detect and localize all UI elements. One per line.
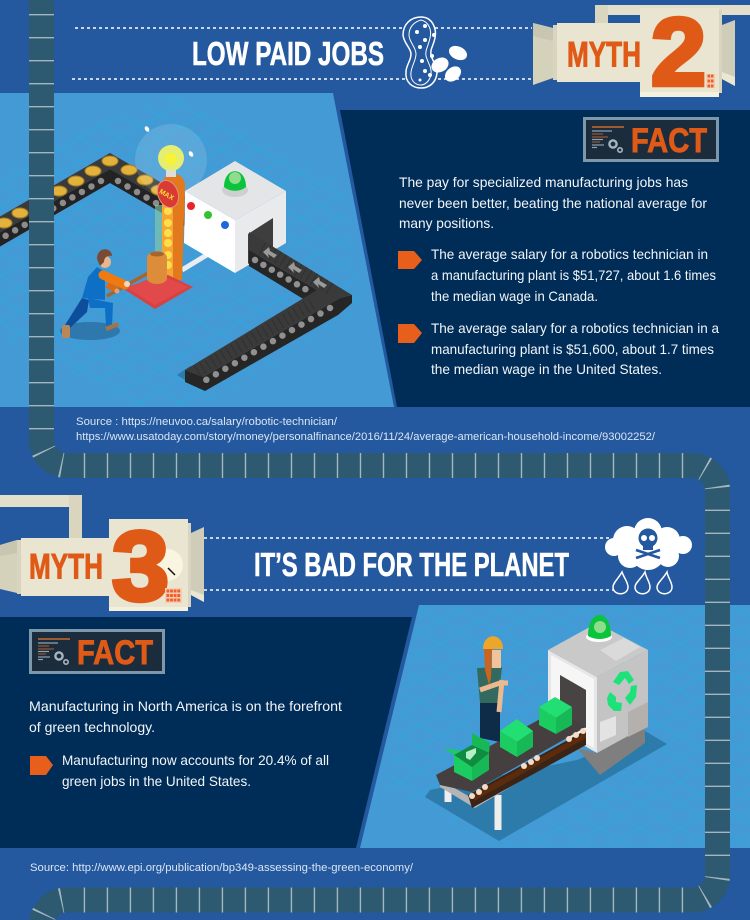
heading: bad for the planet: IT’S BAD FOR THE PLANET (254, 546, 569, 583)
badge: fact myth 2 (584, 118, 718, 160)
text: myth 2 sources (76, 416, 656, 443)
panel: myth 2 illustration floor (0, 93, 394, 407)
icon: bullet arrow (398, 324, 422, 343)
illustration: high striker tower (122, 124, 207, 309)
badge: fact myth 3: FACT (77, 634, 153, 672)
banner: myth 3: MYTH (29, 548, 103, 586)
text: myth 3 fact intro (29, 698, 342, 735)
icon: bullet arrow (30, 756, 53, 775)
badge: fact myth 3 (30, 630, 164, 672)
text: myth 2 sources: Source : https://neuvoo.ca/salary/robotic-technician/ (76, 416, 338, 428)
dotted rules: myth 2 title (72, 28, 532, 79)
banner: myth 2: MYTH (567, 36, 641, 74)
text: us salary: manufacturing plant is $51,600, about 1.7 times (431, 341, 714, 357)
text: canada salary (431, 246, 716, 304)
text: myth 3 fact intro: Manufacturing in North America is on the forefront (29, 698, 342, 714)
heading: low paid jobs: LOW PAID JOBS (192, 35, 384, 72)
dotted rules: myth 3 title (204, 538, 615, 590)
illustration: coin conveyor (0, 153, 200, 258)
panel: myth 3 illustration floor (360, 605, 750, 848)
banner: myth 2: 2 (651, 0, 706, 106)
text: us salary: the median wage in the United States. (431, 361, 662, 377)
text: myth 2 fact intro: The pay for specialized manufacturing jobs has (399, 174, 688, 190)
text: myth 2 fact intro: never been better, beating the national average for (399, 195, 707, 211)
text: green jobs: Manufacturing now accounts for 20.4% of all (62, 752, 329, 768)
illustration: output conveyor (177, 232, 352, 391)
icon: bullet arrow (398, 251, 422, 269)
banner: myth 2 (533, 0, 750, 106)
text: canada salary: a manufacturing plant is $51,727, about 1.6 times (431, 267, 716, 283)
illustration: white machine (182, 161, 286, 273)
banner: myth 3: 3 (112, 511, 169, 621)
panel: myth 3 fact background (0, 617, 412, 848)
illustration: belt with green boxes (436, 697, 586, 830)
illustration: woman worker (477, 636, 508, 742)
illustration: high striker tower: MAX (158, 188, 175, 202)
text: myth 3 fact intro: of green technology. (29, 719, 155, 735)
text: us salary (431, 320, 719, 377)
text: green jobs (62, 752, 329, 789)
text: myth 3 source: Source: http://www.epi.org/publication/bp349-assessing-the-green-economy/ (30, 862, 414, 874)
illustration: worker with mallet (60, 249, 167, 340)
text: us salary: The average salary for a robotics technician in a (431, 320, 719, 336)
text: canada salary: the median wage in Canada. (431, 288, 598, 304)
text: myth 2 fact intro (399, 174, 707, 231)
icon: toxic cloud (605, 518, 692, 594)
text: canada salary: The average salary for a robotics technician in (431, 246, 708, 262)
text: myth 2 fact intro: many positions. (399, 215, 494, 231)
illustration: green box conveyor machine (425, 615, 667, 841)
panel: myth 2 fact background (340, 110, 750, 407)
text: green jobs: green jobs in the United States. (62, 773, 251, 789)
badge: fact myth 2: FACT (631, 122, 707, 160)
icon: peanut (403, 17, 469, 88)
banner: myth 3 (0, 495, 204, 621)
text: myth 2 sources: https://www.usatoday.com/story/money/personalfinance/2016/11/24/average-american-household-income/93002252/ (76, 431, 656, 443)
